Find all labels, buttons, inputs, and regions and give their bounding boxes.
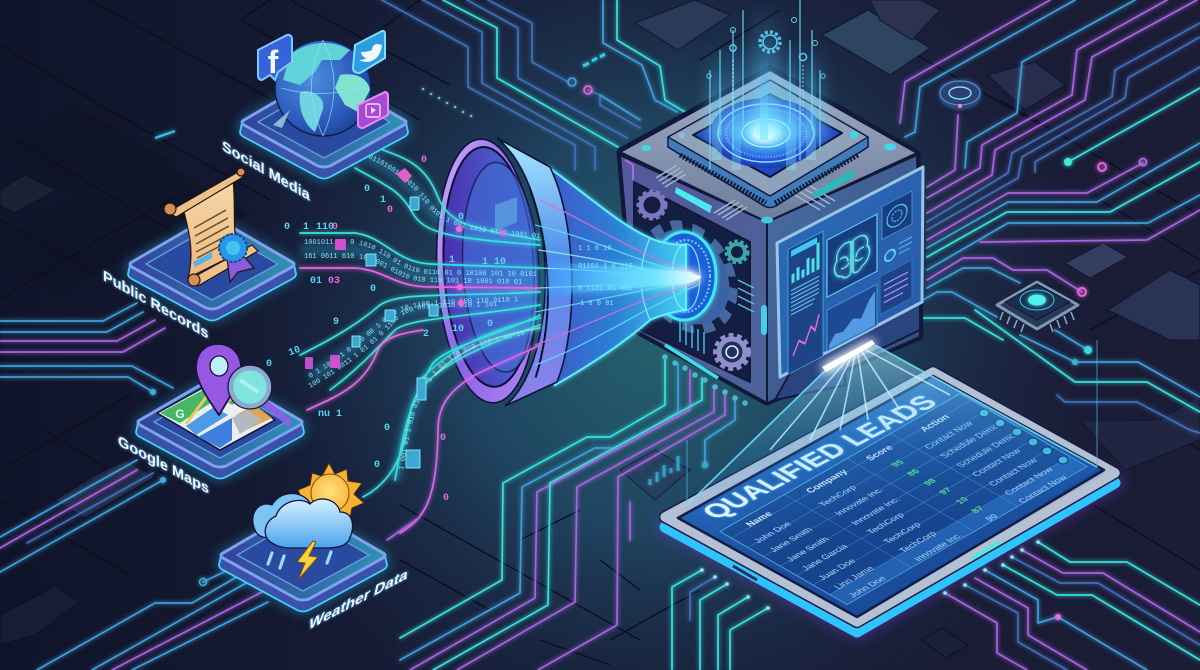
streams: binary along paths: 100 101 0011 1 01 01 0 1100 100 0011 1010 010 1 101 (308, 301, 498, 388)
icon: sun (298, 463, 364, 518)
funnel: document glyph (495, 197, 517, 232)
streams: binary digits: 1 (303, 222, 309, 233)
table header: Score (864, 444, 896, 462)
cube: body (620, 70, 920, 403)
table rows: 95 (889, 459, 906, 468)
cube (620, 0, 923, 406)
table rows: Schedule Demo (938, 423, 1002, 459)
streams: binary digits: 0 (364, 184, 370, 195)
streams: binary digits: 0 (266, 359, 272, 370)
table rows: Juan Doe (816, 557, 858, 581)
streams: binary digits: 0 (374, 460, 380, 471)
funnel: cone body (548, 167, 686, 385)
streams: small document glyphs (305, 168, 438, 468)
emitter and projection light (683, 340, 1100, 617)
streams: binary along paths: 1001011 01 0 1010 110 01 0110 0110 01 0 10100 101 10 0101 (304, 239, 536, 276)
table rows: 87 (969, 505, 986, 514)
icon: brain (835, 231, 869, 284)
table rows: TechCorp (817, 484, 859, 508)
panel: public records (103, 168, 296, 343)
streams: binary digits: 110 (316, 222, 334, 233)
streams: binary digits: 1 (449, 255, 455, 266)
table rows: Jane Garcia (799, 542, 851, 572)
streams: binary digits: 0 (487, 319, 493, 330)
streams: binary digits: 1 10 (482, 257, 506, 268)
streams: binary digits: 2 (423, 329, 429, 340)
table rows: 97 (937, 486, 954, 496)
streams: binary along paths (304, 154, 540, 470)
streams: binary digits: 0 (384, 423, 390, 434)
streams: binary digits (266, 155, 506, 504)
icon: clouds (253, 493, 353, 548)
table rows: Jane Smith (784, 536, 831, 563)
trace end nodes and small marks (150, 54, 1146, 620)
table title: QUALIFIED LEADS (695, 391, 944, 523)
funnel: tiny binary inside: 01101 1 0 110 (578, 263, 633, 271)
funnel: mouth (430, 136, 554, 405)
table rows: Innovate Inc. (832, 486, 886, 517)
streams: binary digits: 0 (284, 222, 290, 233)
funnel: converging light lines (535, 200, 700, 365)
circuit traces: right side (900, 0, 1200, 670)
streams: binary digits: 0 (443, 493, 449, 504)
table rows: TechCorp (897, 530, 939, 554)
table rows: TechCorp (881, 521, 923, 545)
streams: binary digits: nu 1 (318, 409, 342, 420)
table rows: Jane Smith (767, 526, 815, 553)
label: google maps: Google Maps (118, 433, 209, 498)
tablet edge nodes (700, 540, 1040, 610)
table header: Company (804, 468, 851, 495)
cube: dashboard screen (777, 167, 923, 377)
table rows: Schedule Demo (954, 432, 1018, 469)
ring node (940, 81, 980, 109)
streams: binary digits: 0 (458, 212, 464, 223)
platform: social media (240, 74, 408, 180)
streams: binary along paths: 161 0611 610 10 1001 01010 010 110 101 10 1001 010 01 (304, 253, 522, 284)
panel: social media (222, 31, 408, 205)
table rows: Contact Now (970, 447, 1024, 478)
table rows: Contact Now (922, 420, 976, 450)
funnel: tiny binary inside (578, 245, 633, 308)
icon: map (157, 380, 275, 450)
streams: binary digits: 0 (332, 222, 338, 233)
table rows: 90 (983, 513, 1000, 522)
table grid and rows (720, 394, 1089, 605)
streams: binary digits: 0 (421, 155, 427, 166)
funnel: tiny binary inside: 1 1 0 10 (578, 245, 612, 253)
funnel (430, 136, 716, 406)
table rows: Linn Jame (831, 565, 876, 590)
streams: binary digits: 9 (333, 317, 339, 328)
funnel: tiny binary inside: 0 1101 01 001 (578, 285, 633, 293)
funnel: central beam (545, 262, 702, 296)
table rows (751, 412, 1080, 600)
streams: binary digits: 0 (440, 433, 446, 444)
table check marks (979, 409, 1068, 464)
label: public records: Public Records (103, 268, 209, 343)
streams: curved lines (300, 150, 540, 540)
table rows: Contact Now (1002, 466, 1056, 496)
icon: globe (273, 40, 371, 136)
streams: binary digits: 10 (287, 345, 302, 359)
cube: gears (638, 191, 767, 378)
table rows: TechCorp (864, 511, 907, 535)
table rows: 10 (953, 496, 971, 505)
table rows: Innovate Inc. (911, 532, 965, 562)
streams: binary along paths: 01101001 10010 110 0101 1 001 1010 0110 1001 0101 10101 (369, 154, 540, 238)
streams: binary along paths: 0 1 1001 1 0 110 00 1 0110 10 1100 1 110 100 110 0110 1 (308, 296, 518, 378)
small chip (997, 282, 1078, 332)
table rows: 98 (921, 477, 938, 487)
table rows: John Doe (751, 520, 794, 544)
table panel: qualified leads (657, 372, 1123, 640)
streams: binary digits: 0 (370, 284, 376, 295)
table rows: John Doe (846, 575, 888, 599)
cube: top chip (641, 80, 896, 224)
icon: facebook (258, 35, 292, 80)
streams: binary along paths: 1 001 01 1 010 01 1 0 1 1 01 1 0 010 110 1 01 10 (398, 330, 524, 470)
cube: connectors (656, 165, 856, 220)
icon: video (358, 92, 388, 128)
icon: pin (196, 344, 241, 415)
streams: binary digits: 1 (380, 195, 386, 206)
table rows: Innovate Inc. (849, 496, 902, 526)
circuit traces: left side (0, 303, 268, 670)
icon: map: G (175, 407, 185, 421)
streams: binary digits: 0 (387, 205, 393, 216)
tablet body (657, 372, 1123, 640)
table header: Name (744, 510, 776, 528)
funnel: throat opening (641, 238, 700, 320)
cube: vertical beams (706, 0, 826, 170)
panel: weather data (219, 463, 410, 634)
table header: Action (918, 413, 953, 433)
streams: glowing nodes (456, 226, 506, 306)
platform: google maps (136, 374, 304, 480)
streams: binary digits: 01 (310, 276, 322, 287)
icon: lightning and rain (268, 541, 331, 580)
panel: google maps (118, 344, 304, 498)
streams: soft glow bands (300, 158, 540, 480)
funnel: throat ring (652, 232, 716, 320)
platform: weather data (219, 507, 387, 613)
streams: binary digits: 10 (452, 324, 464, 335)
icon: facebook: f (268, 44, 279, 80)
platform: public records (128, 216, 296, 322)
streams: binary digits: 03 (328, 276, 340, 287)
table rows: Contact Now (986, 457, 1040, 487)
data streams (266, 148, 581, 543)
cube: pins (662, 354, 748, 406)
cube: silhouette (621, 70, 919, 401)
funnel: tiny binary inside: 1 0 0 01 (580, 300, 614, 308)
circuit traces: bottom centre (400, 357, 768, 670)
label: weather data: Weather Data (307, 564, 410, 634)
table rows: Contact Now (1016, 474, 1070, 504)
table rows: 86 (904, 468, 922, 477)
circuit traces: upper centre (360, 0, 690, 170)
icon: magnifier (228, 365, 288, 422)
table header (744, 411, 953, 531)
label: social media: Social Media (222, 138, 310, 205)
icon: scroll (164, 168, 258, 286)
icon: twitter (353, 31, 385, 73)
funnel: rim band (497, 138, 572, 406)
